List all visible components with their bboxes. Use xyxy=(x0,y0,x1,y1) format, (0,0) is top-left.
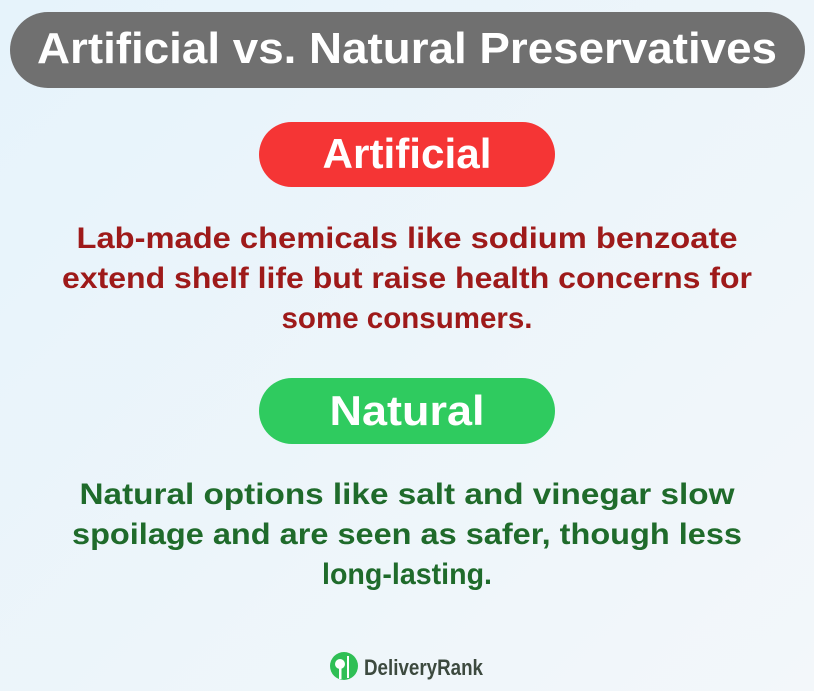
text block: natural description: spoilage and are seen as safer, though less xyxy=(72,518,742,551)
text block: artificial description: some consumers. xyxy=(282,302,532,335)
logo: DeliveryRank: DeliveryRank xyxy=(364,655,484,680)
logo: DeliveryRank xyxy=(330,652,484,680)
text block: artificial description: extend shelf life but raise health concerns for xyxy=(62,262,752,295)
heading: Artificial xyxy=(259,122,555,187)
heading: Natural: Natural xyxy=(330,387,484,434)
heading: Natural xyxy=(259,378,555,444)
heading: Artificial: Artificial xyxy=(322,130,492,177)
title: Artificial vs. Natural Preservatives xyxy=(37,24,777,73)
text block: natural description: long-lasting. xyxy=(322,558,492,591)
title xyxy=(10,12,805,88)
text block: natural description xyxy=(72,478,742,591)
text block: natural description: Natural options like salt and vinegar slow xyxy=(80,478,735,511)
text block: artificial description xyxy=(62,222,752,335)
text block: artificial description: Lab-made chemicals like sodium benzoate xyxy=(76,222,738,255)
